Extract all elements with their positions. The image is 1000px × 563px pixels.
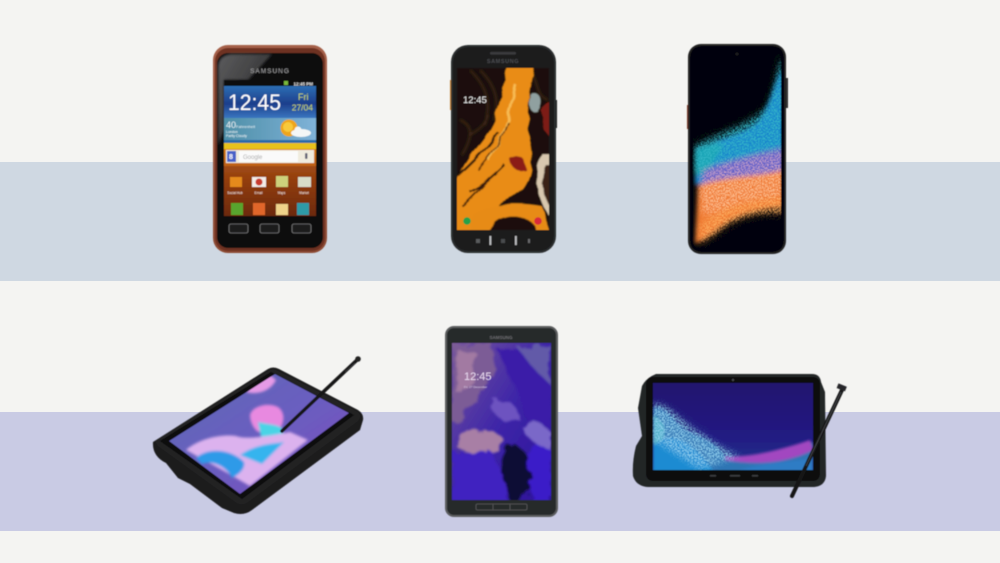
phone hardware buttons — [229, 224, 311, 233]
phone: orange Samsung rugged phone — [213, 45, 327, 253]
phone screen — [224, 80, 316, 216]
wallpaper speckle — [653, 403, 740, 470]
phone screen: 12:45 PM — [293, 82, 313, 86]
phone navigation bar — [476, 236, 530, 245]
phone screen: Social Hub — [227, 191, 243, 195]
phone screen: 12:45 — [463, 95, 487, 106]
tablet: Galaxy Tab Active 2 — [445, 326, 558, 517]
phone screen: London — [226, 130, 238, 134]
phone screen: Market — [299, 191, 309, 195]
tablet screen — [452, 343, 551, 505]
phone screen: Fri — [298, 92, 308, 102]
phone screen: Fahrenheit — [236, 124, 256, 129]
brand label: SAMSUNG — [487, 59, 519, 65]
tablet buttons — [710, 475, 758, 476]
tablet screen: 12:45 — [464, 371, 492, 383]
tablet: Galaxy Tab Active 4 Pro with S Pen — [633, 374, 847, 496]
phone: Galaxy XCover 6 Pro — [687, 44, 788, 254]
phone screen: 27/04 — [292, 102, 313, 112]
app icons row 1 — [230, 177, 242, 187]
tablet home bar — [476, 504, 527, 510]
phone screen: Maps — [278, 191, 286, 195]
phone screen wallpaper — [693, 50, 784, 248]
phone screen: 8 — [229, 154, 233, 161]
wallpaper background streaks — [460, 70, 548, 155]
phone screen: 40 — [226, 120, 236, 130]
phone screen: Email — [255, 191, 263, 195]
tablet screen: Fri, 27 December — [464, 385, 487, 389]
brand label: SAMSUNG — [250, 68, 290, 75]
wave speckle — [695, 60, 784, 244]
phone screen: Partly Cloudy — [226, 134, 247, 138]
tablet screen — [169, 374, 349, 494]
brand label: SAMSUNG — [489, 335, 513, 340]
phone screen: 12:45 — [228, 90, 281, 115]
wave solid base — [695, 72, 784, 244]
band: phones row — [0, 162, 1000, 281]
phone screen: Google — [243, 155, 263, 161]
app icons row 2 — [231, 203, 243, 215]
tablet: Galaxy Tab Active Pro with S Pen — [153, 356, 363, 514]
tablet screen — [653, 383, 813, 476]
S Pen — [792, 383, 847, 496]
S Pen — [282, 356, 361, 431]
band: tablets row — [0, 412, 1000, 531]
phone screen — [452, 66, 552, 235]
phone: Galaxy XCover 4s — [450, 45, 557, 253]
